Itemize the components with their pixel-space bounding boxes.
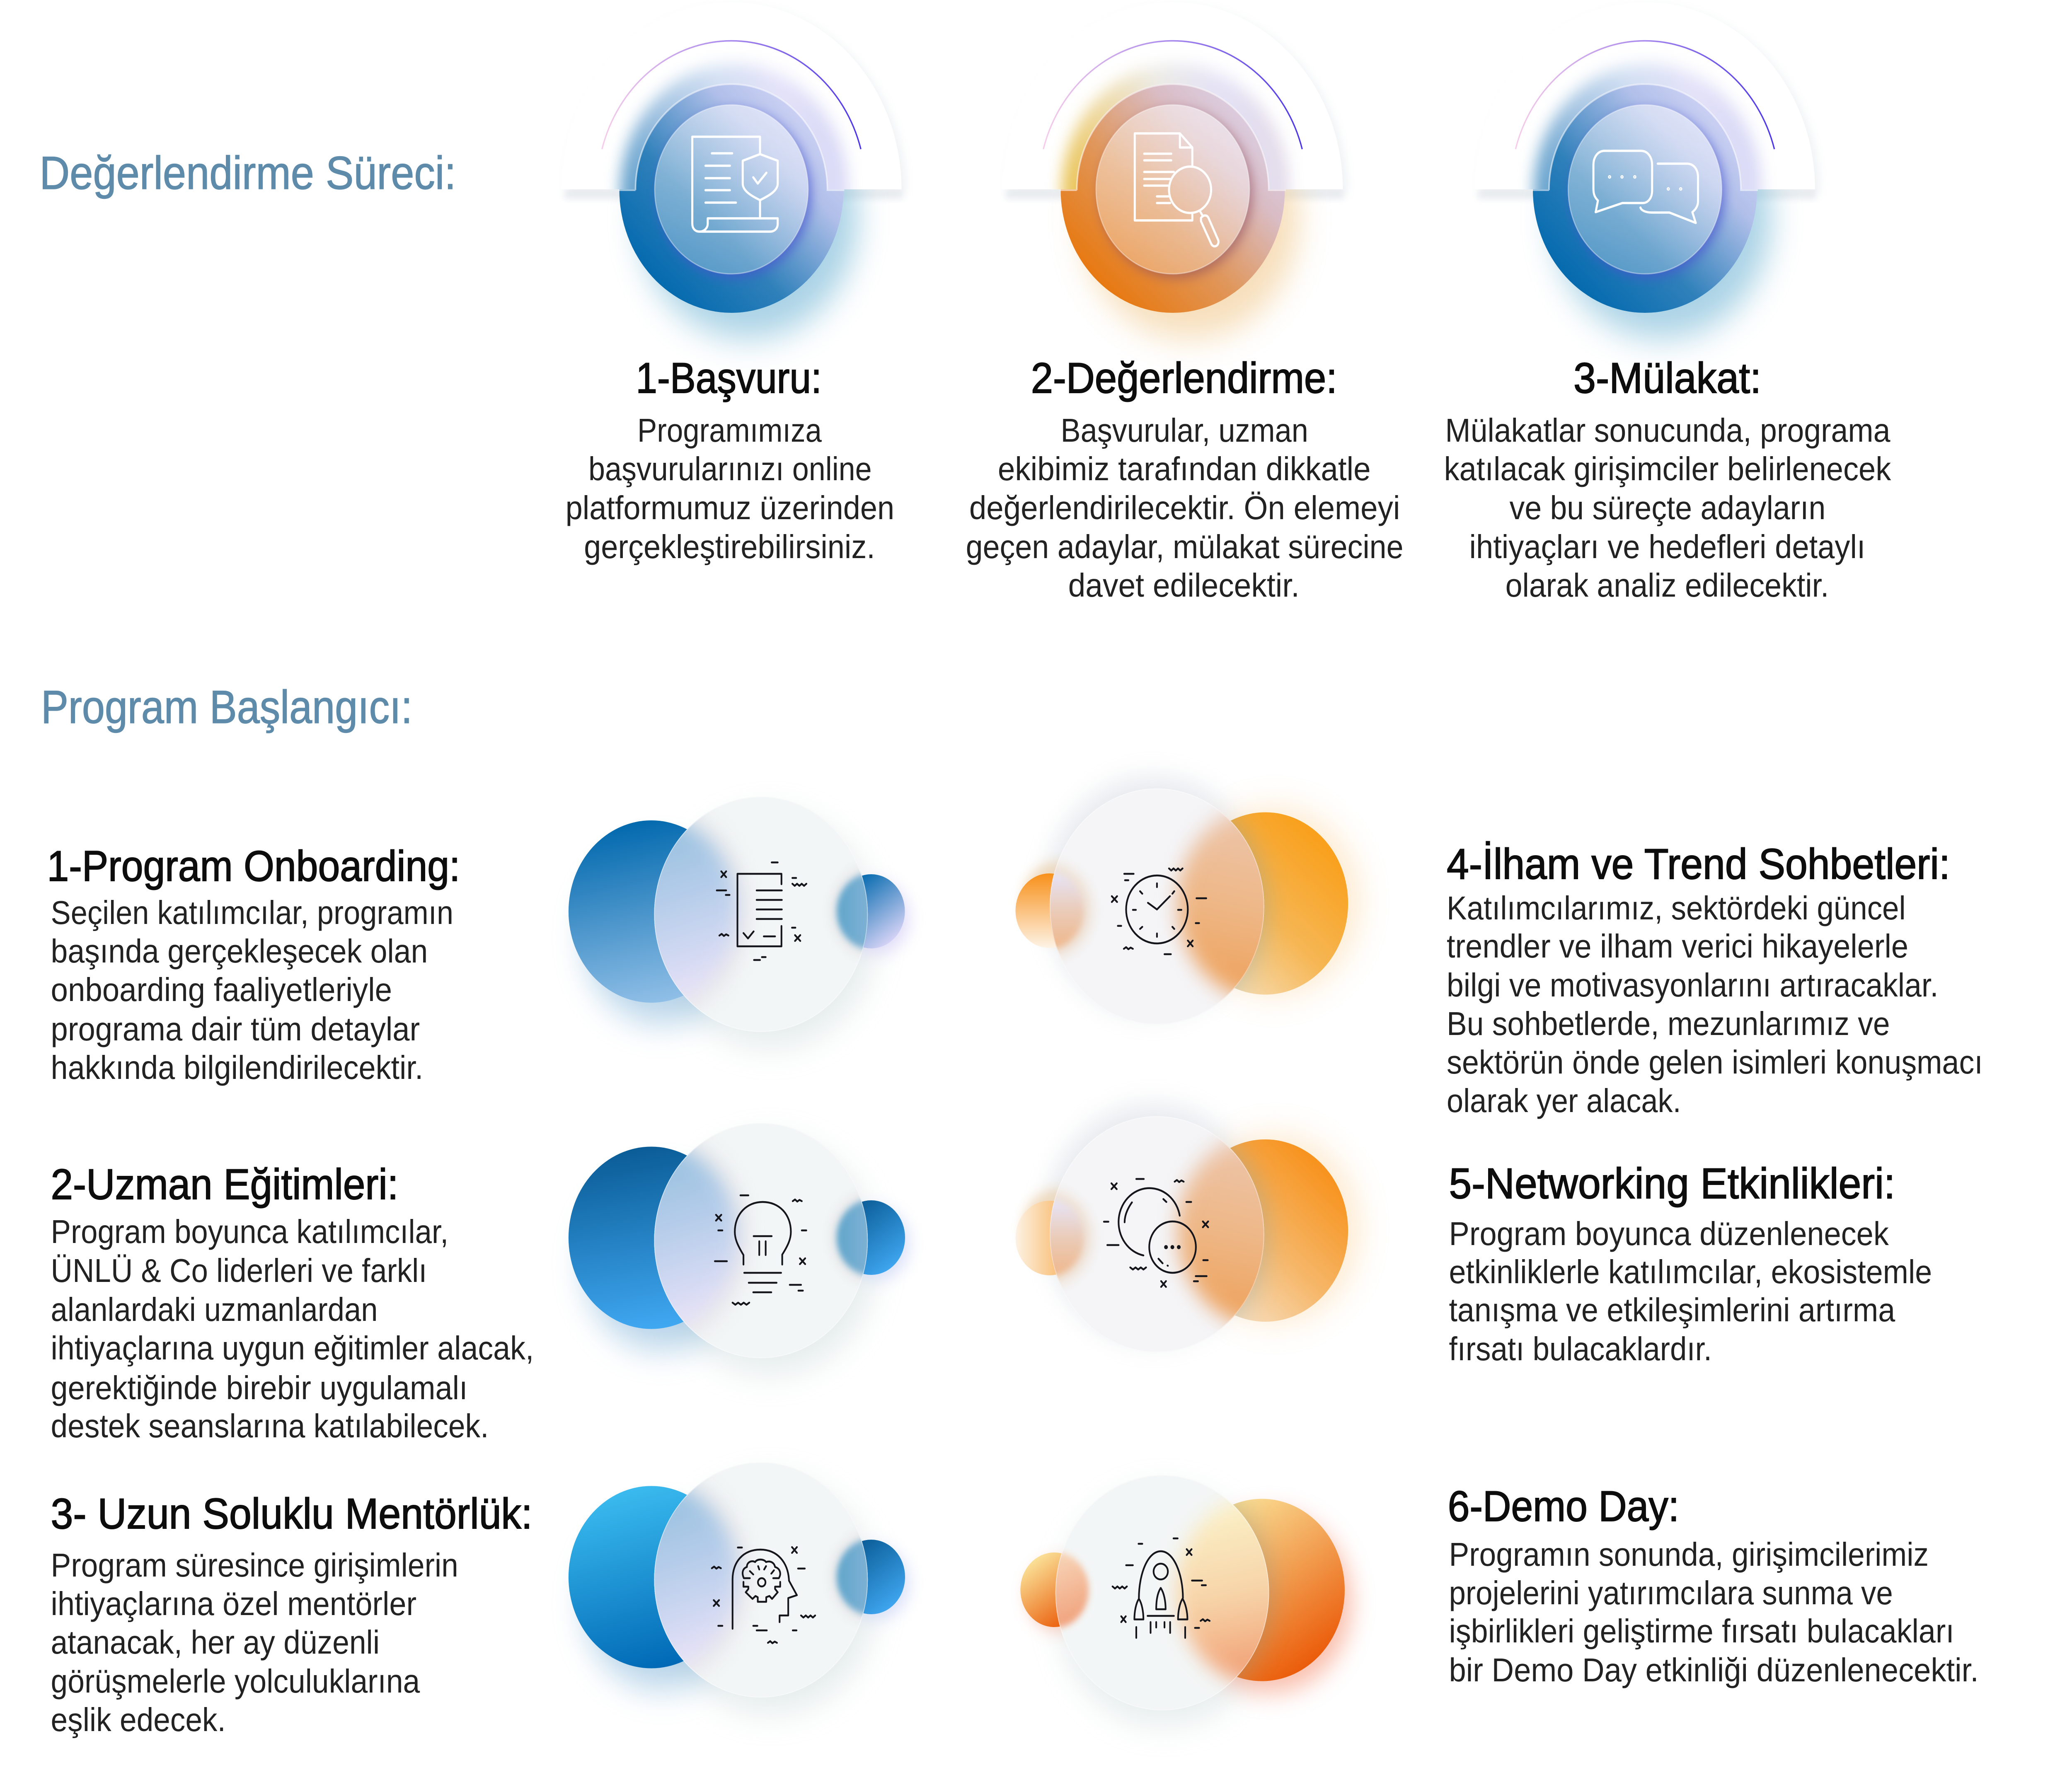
icon: document checklist: [717, 863, 806, 960]
item 2 text: Uzman Eğitimleri: 2-Uzman Eğitimleri:: [51, 1161, 399, 1209]
glass graphic 4: inspiration talks: [1006, 776, 1360, 1025]
item 1 text: Program Onboarding: hakkında bilgilendirilecektir.: [51, 1049, 423, 1086]
item 5 text: Networking Etkinlikleri: fırsatı bulacaklardır.: [1449, 1331, 1712, 1368]
item 6 text: Demo Day: bir Demo Day etkinliği düzenlenecektir.: [1449, 1652, 1979, 1689]
item 6 text: Demo Day: [1448, 1482, 1979, 1689]
item 3 text: Uzun Soluklu Mentörlük: ihtiyaçlarına özel mentörler: [51, 1586, 416, 1623]
icon: light bulb: [715, 1195, 806, 1305]
item 4 text: İlham ve Trend Sohbetleri: olarak yer alacak.: [1447, 1083, 1681, 1120]
item 1 text: Program Onboarding: onboarding faaliyetleriyle: [51, 972, 392, 1008]
icon: document with shield: [692, 137, 778, 232]
step 1 text: başvurularınızı online: [588, 451, 872, 488]
item 3 text: Uzun Soluklu Mentörlük: eşlik edecek.: [51, 1702, 226, 1739]
glass graphic 1: onboarding: [553, 796, 913, 1047]
step 1 text: Programımıza: [637, 412, 822, 449]
item 2 text: Uzman Eğitimleri: Program boyunca katılımcılar,: [51, 1214, 448, 1250]
glass graphic 5: networking: [1006, 1104, 1360, 1352]
item 6 text: Demo Day: 6-Demo Day:: [1448, 1482, 1679, 1531]
item 3 text: Uzun Soluklu Mentörlük: görüşmelerle yolculuklarına: [51, 1663, 420, 1700]
item 2 text: Uzman Eğitimleri: [51, 1161, 534, 1445]
item 4 text: İlham ve Trend Sohbetleri: 4-İlham ve Trend Sohbetleri:: [1447, 840, 1950, 888]
step 2 text: geçen adaylar, mülakat sürecine: [966, 529, 1404, 566]
item 2 text: Uzman Eğitimleri: alanlardaki uzmanlardan: [51, 1291, 378, 1328]
item 3 text: Uzun Soluklu Mentörlük: Program süresince girişimlerin: [51, 1547, 458, 1584]
step 3 text: katılacak girişimciler belirlenecek: [1444, 451, 1891, 488]
glass graphic 6: demo day: [1020, 1475, 1352, 1724]
item 2 text: Uzman Eğitimleri: ihtiyaçlarına uygun eğitimler alacak,: [51, 1330, 534, 1367]
item 1 text: Program Onboarding: 1-Program Onboarding:: [47, 842, 460, 890]
item 1 text: Program Onboarding: programa dair tüm detaylar: [51, 1011, 420, 1048]
item 5 text: Networking Etkinlikleri: tanışma ve etkileşimlerini artırma: [1449, 1292, 1895, 1329]
step 3 text: ihtiyaçları ve hedefleri detaylı: [1469, 529, 1866, 566]
heading: Program Başlangıcı: Program Başlangıcı:: [41, 681, 412, 733]
item 3 text: Uzun Soluklu Mentörlük: 3- Uzun Soluklu Mentörlük:: [51, 1490, 533, 1538]
step 2 text: ekibimiz tarafından dikkatle: [998, 451, 1371, 488]
item 1 text: Program Onboarding: başında gerçekleşecek olan: [51, 933, 428, 970]
icon detail: gear hub: [758, 1578, 765, 1586]
step 1 text: platformumuz üzerinden: [566, 490, 894, 527]
step 2 text: 2-Değerlendirme:: [1031, 354, 1337, 402]
arc: gradient outline: [1515, 41, 1774, 149]
item 4 text: İlham ve Trend Sohbetleri: sektörün önde gelen isimleri konuşmacı: [1447, 1044, 1983, 1081]
icon: speech bubbles: [1593, 151, 1698, 223]
item 5 text: Networking Etkinlikleri: 5-Networking Etkinlikleri:: [1449, 1160, 1895, 1208]
arc: gradient outline: [1043, 41, 1302, 149]
icon: rocket: [1113, 1538, 1210, 1638]
item 4 text: İlham ve Trend Sohbetleri: Bu sohbetlerde, mezunlarımız ve: [1447, 1006, 1890, 1042]
step 2 text: Başvurular, uzman: [1060, 412, 1308, 449]
item 2 text: Uzman Eğitimleri: destek seanslarına katılabilecek.: [51, 1408, 489, 1445]
item 5 text: Networking Etkinlikleri: etkinliklerle katılımcılar, ekosistemle: [1449, 1254, 1932, 1291]
item 1 text: Program Onboarding: Seçilen katılımcılar, programın: [51, 895, 453, 931]
step 3 text: 3-Mülakat:: [1573, 354, 1761, 402]
step 1 text: gerçekleştirebilirsiniz.: [584, 529, 875, 566]
heading: Değerlendirme Süreci: Değerlendirme Süreci:: [39, 147, 456, 199]
item 4 text: İlham ve Trend Sohbetleri: [1447, 840, 1983, 1120]
item 6 text: Demo Day: Programın sonunda, girişimcilerimiz: [1449, 1536, 1929, 1573]
item 2 text: Uzman Eğitimleri: gerektiğinde birebir uygulamalı: [51, 1370, 468, 1407]
step 2 text: davet edilecektir.: [1068, 567, 1300, 604]
item 1 text: Program Onboarding: [47, 842, 460, 1086]
badge: step 1 application: [562, 2, 906, 339]
item 3 text: Uzun Soluklu Mentörlük: [51, 1490, 533, 1739]
step 3 text: olarak analiz edilecektir.: [1506, 567, 1829, 604]
step 3 text: [1444, 354, 1891, 604]
item 6 text: Demo Day: işbirlikleri geliştirme fırsatı bulacakları: [1449, 1613, 1954, 1650]
badge: step 3 interview: [1475, 2, 1820, 339]
glass graphic 3: mentorship: [553, 1462, 913, 1712]
step 3 text: Mülakatlar sonucunda, programa: [1445, 412, 1890, 449]
icon: document with magnifier: [1135, 133, 1218, 247]
step 1 text: [566, 354, 894, 566]
step 1 text: 1-Başvuru:: [636, 354, 822, 402]
item 4 text: İlham ve Trend Sohbetleri: bilgi ve motivasyonlarını artıracaklar.: [1447, 967, 1939, 1004]
item 5 text: Networking Etkinlikleri: Program boyunca düzenlenecek: [1449, 1216, 1889, 1253]
item 5 text: Networking Etkinlikleri: [1449, 1160, 1932, 1368]
item 2 text: Uzman Eğitimleri: ÜNLÜ & Co liderleri ve farklı: [51, 1253, 427, 1289]
item 4 text: İlham ve Trend Sohbetleri: Katılımcılarımız, sektördeki güncel: [1447, 890, 1906, 927]
step 3 text: ve bu süreçte adayların: [1510, 490, 1825, 527]
icon: head with brain and gear: [712, 1547, 815, 1643]
badge: step 2 evaluation: [1003, 2, 1347, 339]
item 6 text: Demo Day: projelerini yatırımcılara sunma ve: [1449, 1575, 1893, 1612]
arc: gradient outline: [602, 41, 861, 149]
icon: clock: [1112, 868, 1206, 954]
item 4 text: İlham ve Trend Sohbetleri: trendler ve ilham verici hikayelerle: [1447, 928, 1908, 965]
step 2 text: değerlendirilecektir. Ön elemeyi: [969, 490, 1400, 527]
icon: conversation circles: [1104, 1179, 1208, 1287]
glass graphic 2: expert trainings: [553, 1123, 913, 1373]
step 2 text: [966, 354, 1404, 604]
item 3 text: Uzun Soluklu Mentörlük: atanacak, her ay düzenli: [51, 1624, 380, 1661]
